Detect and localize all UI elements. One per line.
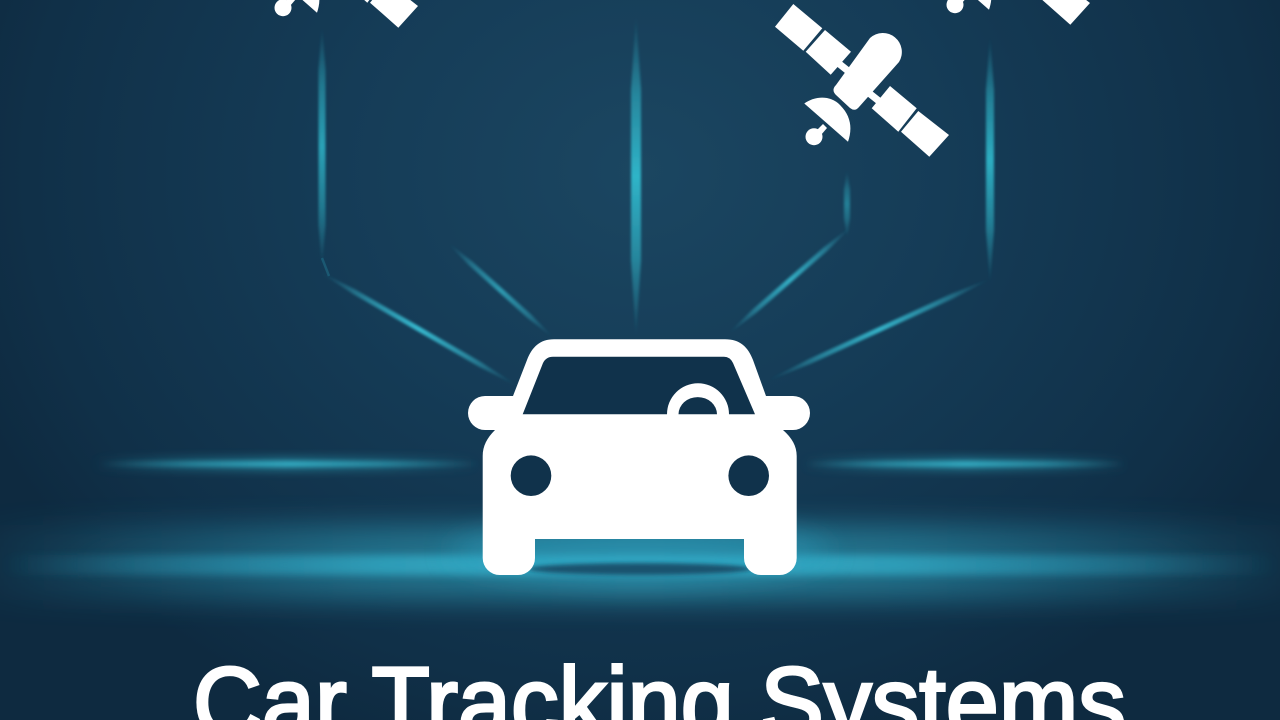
steering arc opening [678,397,717,414]
satellite: centre right [775,4,949,157]
ground glow [0,524,1280,600]
left headlight [511,455,551,496]
icon: car front view [468,339,810,575]
right headlight [728,455,769,496]
signal beams [318,15,994,388]
satellite: top right, cropped [916,0,1090,25]
windshield [523,357,755,414]
satellite: top left, cropped [244,0,418,28]
horizon light lines [90,456,1130,472]
